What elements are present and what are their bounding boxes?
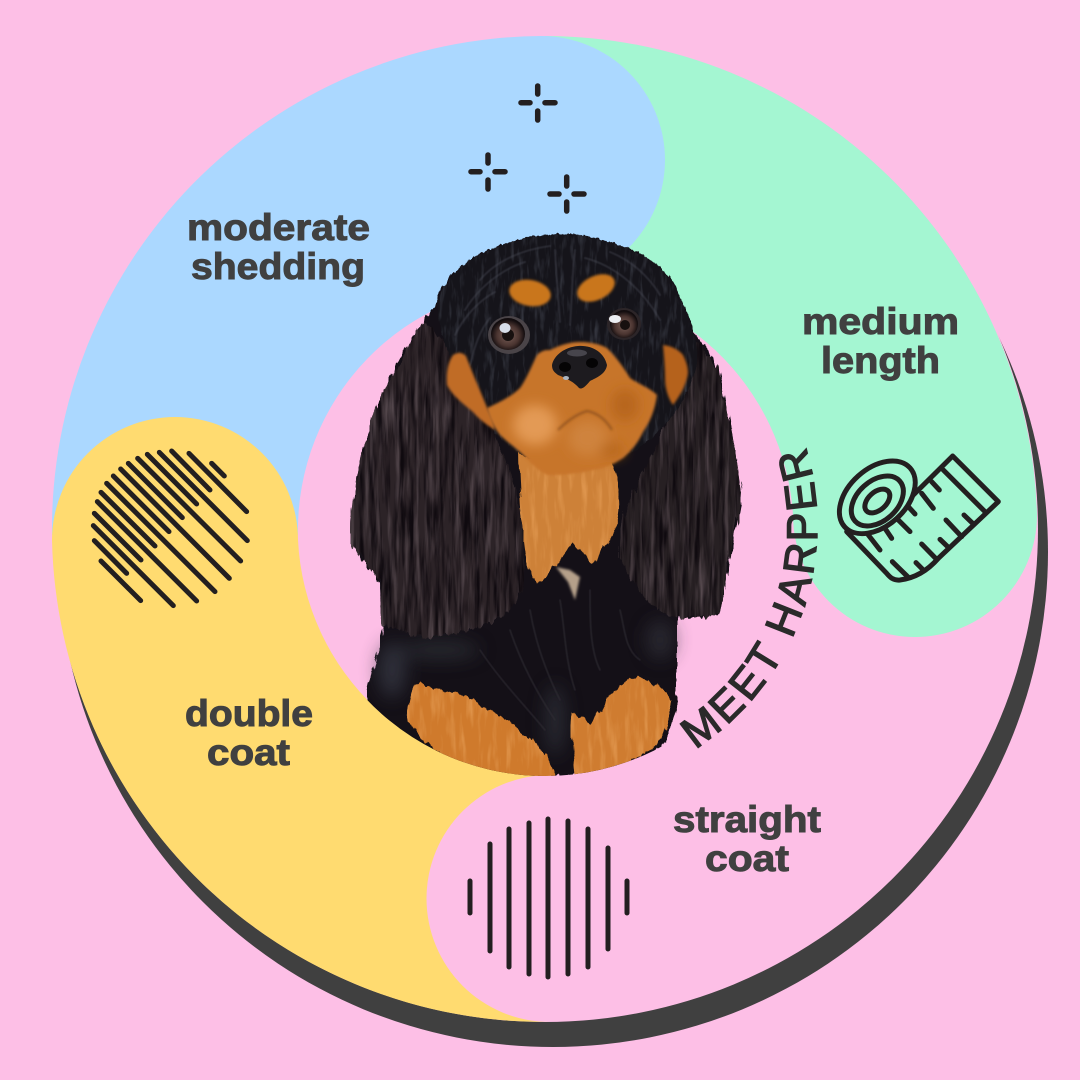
left ear tan patch bbox=[447, 353, 495, 430]
blue segment: moderate shedding bbox=[52, 36, 665, 535]
left eye bbox=[488, 316, 530, 354]
label: double coat: double bbox=[185, 693, 313, 734]
icon: double coat diagonal lines bbox=[93, 451, 247, 606]
label: straight coat bbox=[673, 799, 821, 879]
dog chest tan bbox=[518, 452, 620, 584]
icon: measuring tape bbox=[825, 447, 998, 580]
muzzle tan bbox=[487, 342, 657, 475]
muzzle highlights bbox=[513, 389, 639, 457]
label: moderate shedding bbox=[187, 207, 370, 287]
right brow bbox=[575, 272, 617, 304]
label: straight coat: coat bbox=[705, 838, 789, 879]
dog left ear bbox=[352, 322, 524, 637]
green segment: medium length bbox=[545, 36, 1037, 637]
head fur highlights bbox=[455, 246, 660, 365]
dog lower tan right bbox=[572, 677, 673, 775]
dog silhouette bbox=[352, 234, 741, 777]
label: double coat: coat bbox=[207, 732, 290, 773]
label: medium length: medium bbox=[802, 301, 959, 342]
label: double coat bbox=[185, 693, 313, 773]
left brow bbox=[507, 277, 553, 309]
dog head bbox=[437, 234, 697, 465]
right eye bbox=[607, 308, 641, 340]
dog body side shading bbox=[378, 620, 674, 756]
label: straight coat: straight bbox=[673, 799, 821, 840]
icon: sparkles for shedding bbox=[471, 86, 584, 211]
label: medium length: length bbox=[821, 340, 940, 381]
label: medium length bbox=[802, 301, 959, 381]
nose bbox=[552, 346, 607, 389]
yellow segment: double coat bbox=[52, 417, 550, 1022]
dog chest white tuft bbox=[556, 567, 580, 600]
dog photo bbox=[352, 234, 741, 778]
dog right ear bbox=[620, 320, 741, 618]
label: moderate shedding: moderate bbox=[187, 207, 370, 248]
icon: straight coat vertical lines bbox=[470, 819, 627, 977]
label: moderate shedding: shedding bbox=[191, 246, 365, 287]
muzzle lip line bbox=[558, 411, 612, 430]
right ear tan patch bbox=[663, 345, 688, 405]
neck fur strands bbox=[480, 590, 640, 730]
curved title: MEET HARPER: MEET HARPER bbox=[679, 447, 818, 748]
dog lower tan left bbox=[408, 683, 556, 778]
